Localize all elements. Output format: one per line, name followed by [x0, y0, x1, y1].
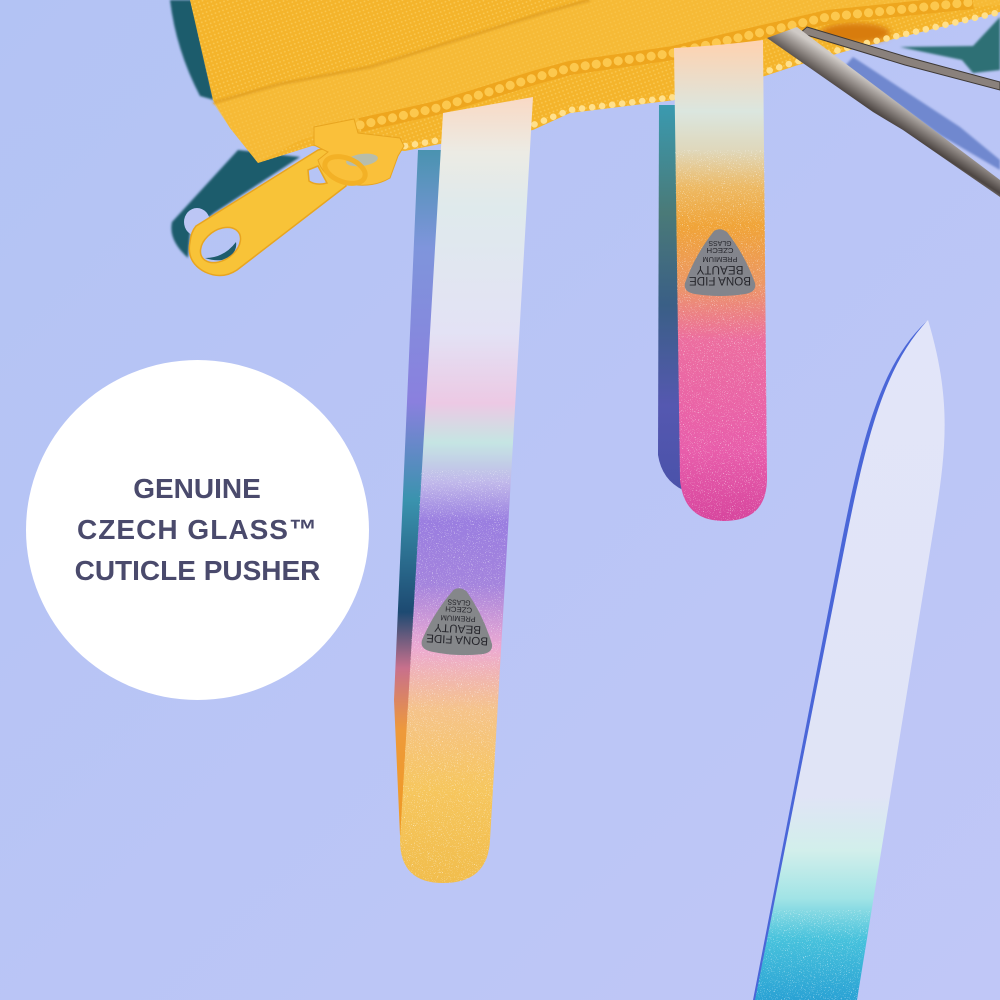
callout text: CUTICLE PUSHER	[75, 555, 320, 586]
metal pick logo: GLASS	[447, 597, 471, 608]
metal pick logo: CZECH	[706, 246, 734, 255]
zipper teeth upper row	[360, 2, 973, 125]
callout text: GENUINE	[133, 473, 261, 504]
thick arm	[767, 27, 1000, 197]
tweezers	[767, 27, 1000, 197]
slider body	[314, 119, 404, 185]
metal pick logo: BEAUTY	[434, 621, 481, 635]
nail file shadow: centre	[394, 150, 441, 845]
pull hole shadow	[205, 242, 236, 260]
glitter	[675, 150, 767, 521]
zipper teeth lower row	[405, 12, 1000, 146]
metal pick logo: GLASS	[708, 239, 732, 248]
nail file: lower right blade	[755, 320, 945, 1000]
lighter zipper tape	[213, 0, 1000, 163]
pouch stitch crease	[213, 0, 590, 103]
glitter	[755, 910, 870, 1000]
pull tab	[189, 149, 346, 276]
fabric weave	[190, 0, 1000, 163]
pouch body	[190, 0, 1000, 163]
metal pick logo	[685, 229, 755, 296]
nail file shadow: right	[658, 105, 683, 490]
nail file: right	[674, 40, 767, 521]
slider loop	[321, 152, 369, 188]
metal pick logo: BONA FIDE	[689, 274, 751, 286]
slider window	[345, 152, 379, 168]
glitter	[400, 470, 510, 883]
metal pick logo: CZECH	[445, 604, 472, 615]
metal pick logo: PREMIUM	[440, 613, 476, 624]
nail file: centre	[400, 97, 533, 883]
thin arm	[800, 27, 1000, 90]
white circle	[26, 360, 369, 700]
metal pick logo: PREMIUM	[702, 255, 738, 264]
metal pick logo	[421, 586, 495, 657]
metal pick logo: BONA FIDE	[426, 631, 488, 647]
callout circle with label	[26, 360, 369, 700]
zipper slider and pull	[189, 119, 404, 276]
shadow: top right tweezers	[845, 17, 1000, 170]
callout text	[75, 473, 320, 586]
callout text: CZECH GLASS™	[77, 514, 317, 545]
blade shadow: lower right file	[753, 322, 926, 1000]
dark fold under tweezers	[820, 23, 890, 43]
yellow zipper pouch	[190, 0, 1000, 163]
shadow: bag and zipper pull	[170, 0, 300, 258]
metal pick logo: BEAUTY	[696, 263, 744, 275]
